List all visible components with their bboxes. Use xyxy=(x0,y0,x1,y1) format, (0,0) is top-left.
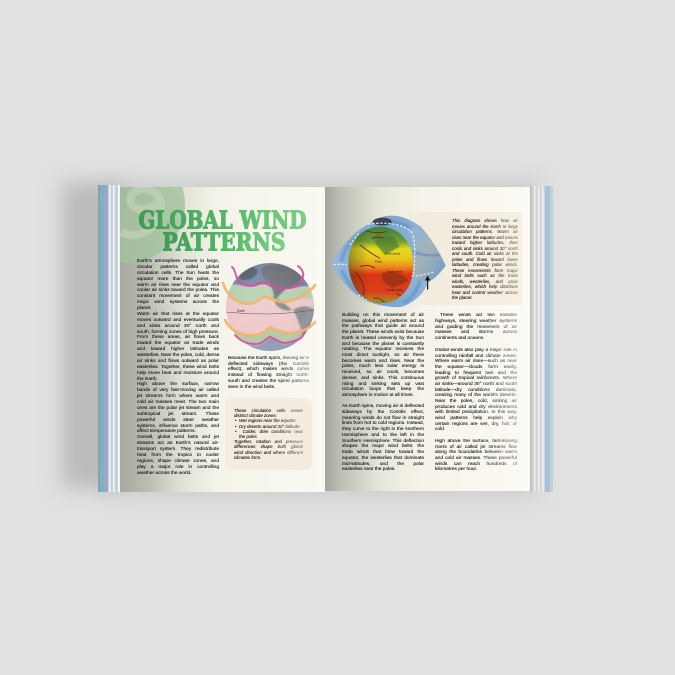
text: right page column one, first paragraph: poles, much less solar energy is xyxy=(342,364,424,369)
text: left column: constant movement of air creates xyxy=(137,294,219,299)
text: left column: the Earth. xyxy=(137,376,158,382)
white cloud seams xyxy=(333,223,435,300)
text: left column: jet streams form where warm and xyxy=(137,394,219,399)
equator xyxy=(226,310,314,314)
text: right page column one, second paragraph: As Earth spins, moving air is deflected xyxy=(342,404,424,409)
southern ocean xyxy=(245,338,298,351)
text: right page column one, first paragraph: becomes warm and rises. Near the xyxy=(342,359,424,364)
text: right page column two, first paragraph xyxy=(435,313,517,342)
text: right page column one, first paragraph: Earth is heated unevenly by the Sun xyxy=(342,336,424,341)
text: right page column one, first paragraph: and because the planet is constantly xyxy=(342,342,424,347)
text: right page column one, first paragraph: rotating. The equator receives the xyxy=(342,347,424,352)
text: left column: powerful winds steer weather xyxy=(137,418,219,423)
wind arrows xyxy=(355,230,407,302)
text: right page column one, second paragraph: mid-latitudes, and the polar xyxy=(342,462,424,466)
text: left column: play a major role in controlling xyxy=(137,465,219,470)
text: right page column one, first paragraph: the pathways that guide air around xyxy=(342,324,424,329)
text: right page column two, second paragraph xyxy=(435,348,517,433)
heated sphere xyxy=(345,225,415,305)
text: right page column one, first paragraph: most direct sunlight, so air there xyxy=(342,353,424,358)
text: right page column one, first paragraph: the planet. These winds exist because xyxy=(342,330,424,335)
text: right page column one, first paragraph: atmosphere in motion at all times. xyxy=(342,393,414,398)
text: left column: and sinks around 30° north and xyxy=(137,324,219,329)
wind ribbon: southern polar xyxy=(235,332,305,344)
text: left column xyxy=(136,258,220,476)
text: right page column one, second paragraph: Southern Hemisphere. This deflection xyxy=(342,438,424,444)
text: right page column one, first paragraph xyxy=(342,312,424,398)
text: right page column one, first paragraph: denser, and sinks. This continuous xyxy=(342,376,424,381)
text: right page column one, second paragraph: equator, the westerlies that dominate xyxy=(342,456,424,461)
text: left column: and toward higher latitudes as xyxy=(137,347,219,352)
northern land xyxy=(261,264,303,300)
text: right page column one, second paragraph: meaning winds do not flow in straight xyxy=(342,416,424,420)
text: left column: circular patterns called global xyxy=(137,265,219,270)
text: right page column one, second paragraph: sideways by the Coriolis effect, xyxy=(342,410,424,415)
text: right page column one, second paragraph: trade winds that blow toward the xyxy=(342,450,424,455)
text: left column: south, forming zones of high pressure. xyxy=(137,330,219,334)
wind ribbon: northern polar xyxy=(232,266,303,288)
text: left column: transport system. They redistribute xyxy=(137,447,219,452)
text: left column: toward the equator as trade winds xyxy=(137,341,219,346)
title: GLOBAL WIND xyxy=(138,206,306,234)
text: left column: Overall, global wind belts and jet xyxy=(137,435,219,440)
text: left column: circulation cells. The Sun heats the xyxy=(137,271,219,276)
text: left column: weather across the world. xyxy=(137,470,192,476)
illustration: atmospheric circulation cutaway xyxy=(332,216,446,307)
text: left column: air sinks and flows outward as polar xyxy=(137,359,219,364)
text: right page column one, second paragraph: lines from hot to cold regions. Instead, xyxy=(342,421,424,426)
text: left column: heat from the tropics to cooler xyxy=(137,453,219,458)
text: left column: High above the surface, narrow xyxy=(137,382,219,387)
top blue-grey ocean xyxy=(232,263,310,290)
left page xyxy=(120,187,325,492)
text: left column: Earth's atmosphere moves in large, xyxy=(137,259,219,264)
open book illustration xyxy=(54,173,553,500)
northern green band xyxy=(227,284,314,302)
text: left column: affect temperature patterns. xyxy=(137,429,196,434)
text: Coriolis paragraph xyxy=(228,356,309,390)
text: right page column one, first paragraph: rising and sinking sets up vast xyxy=(342,382,424,387)
text: right page column one, second paragraph: they curve to the right in the Northern xyxy=(342,427,424,432)
text: left column: ones are the polar jet stream and the xyxy=(137,406,219,411)
text: left column: From these areas, air flows back xyxy=(137,335,219,340)
text: left column: streams act as Earth's natural air- xyxy=(137,441,219,446)
text: left column: help move heat and moisture around xyxy=(137,371,219,376)
text: left column: subtropical jet stream. These xyxy=(137,412,219,417)
shell depth shading xyxy=(342,222,420,303)
text: left column: equator more than the poles, so xyxy=(137,277,219,282)
title: PATTERNS xyxy=(162,228,286,256)
globe label: Earth xyxy=(237,309,245,313)
text: right page column one, second paragraph: shapes the major wind belts: the xyxy=(342,444,424,449)
text: right page column one, second paragraph: easterlies near the poles. xyxy=(342,467,396,472)
text: right page column two, third paragraph xyxy=(435,439,517,473)
arrow xyxy=(425,276,430,290)
diagram note background xyxy=(395,212,522,305)
sphere labels: Subtropical xyxy=(385,251,400,255)
sphere labels: Trade winds xyxy=(387,288,403,292)
text: left column: systems, influence storm paths, and xyxy=(137,424,219,428)
wind ribbon: southern subtropical xyxy=(225,320,315,335)
text: left column: planet. xyxy=(137,306,151,311)
text: left column: major wind systems across the xyxy=(137,300,219,305)
right page edge stripes xyxy=(530,186,553,492)
text: right page column one, second paragraph: Hemisphere and to the left in the xyxy=(342,433,424,438)
title xyxy=(138,206,306,256)
text: left column: westerlies. Near the poles, cold, dense xyxy=(137,353,219,358)
text: left column: moves outward and eventually cools xyxy=(137,318,219,323)
southern green band xyxy=(233,328,307,344)
right shell lobe xyxy=(408,226,446,282)
illustration: Earth with wind ribbons xyxy=(222,260,318,356)
text: left column: cold air masses meet. The two main xyxy=(137,400,219,405)
sphere labels: Polar xyxy=(375,259,382,263)
text: right page column one, first paragraph: circulation loops that keep the xyxy=(342,387,424,392)
book shadow xyxy=(62,180,540,496)
text: left column: cooler air sinks toward the poles. This xyxy=(137,288,219,293)
decorative green circle with numeral xyxy=(120,187,185,263)
text: left column: regions, shape climate zones, and xyxy=(137,459,219,464)
wind ribbon: northern subtropical xyxy=(223,283,315,304)
continent xyxy=(382,272,408,288)
text: right page column one, second paragraph xyxy=(342,404,424,472)
text: left column: easterlies. Together, these wind belts xyxy=(137,365,219,370)
text: left column: warm air rises near the equator and xyxy=(137,282,219,288)
text: right page column one, first paragraph: Building on this movement of air xyxy=(342,313,424,318)
land: South America xyxy=(293,306,316,335)
text: diagram note xyxy=(452,218,518,300)
text: climate zones callout xyxy=(234,408,303,460)
text: right page column one, first paragraph: received, so air cools, becomes xyxy=(342,370,424,375)
text: left column: bands of very fast-moving air called xyxy=(137,388,219,393)
text: right page column one, first paragraph: masses, global wind patterns act as xyxy=(342,319,424,324)
text: left column: Warm air that rises at the equator xyxy=(137,312,219,317)
climate zones callout background xyxy=(225,398,312,470)
shell body xyxy=(332,216,446,307)
sphere labels: Trade winds xyxy=(387,269,403,273)
sphere labels xyxy=(375,251,403,292)
right page xyxy=(325,187,530,491)
left page edge stripes xyxy=(98,185,120,492)
top shell cap xyxy=(373,218,392,226)
